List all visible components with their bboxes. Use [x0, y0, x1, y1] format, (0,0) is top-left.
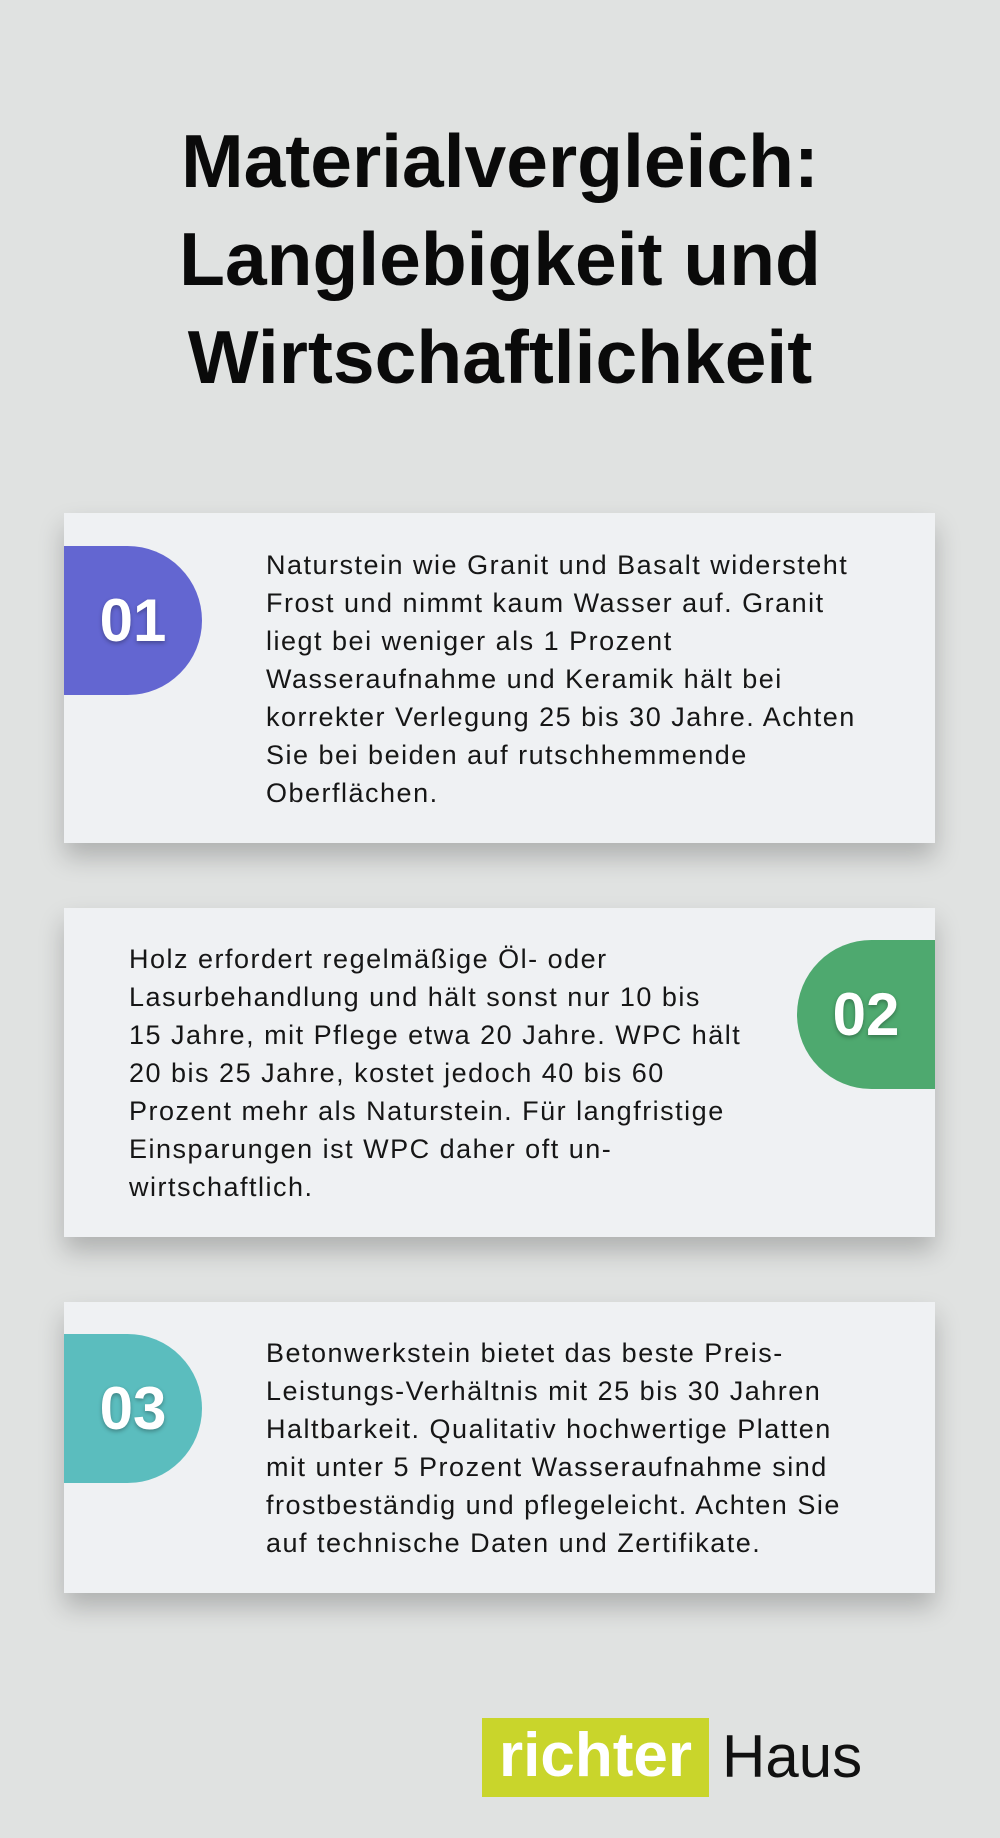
text 01: Sie bei beiden auf rutschhemmende — [266, 740, 748, 770]
text 03: frostbeständig und pflegeleicht. Achten Sie — [266, 1490, 841, 1520]
title: Langlebigkeit und — [179, 217, 821, 301]
logo box richter: richter — [499, 1721, 692, 1790]
text 01: Frost und nimmt kaum Wasser auf. Granit — [266, 588, 825, 618]
text 01: Naturstein wie Granit und Basalt widersteht — [266, 550, 848, 580]
text 01 — [266, 550, 856, 808]
text 01: Wasseraufnahme und Keramik hält bei — [266, 664, 783, 694]
badge 03: 03 — [100, 1375, 166, 1442]
text 02: 20 bis 25 Jahre, kostet jedoch 40 bis 60 — [129, 1058, 665, 1088]
text 02: Prozent mehr als Naturstein. Für langfristige — [129, 1096, 725, 1126]
text 03: Haltbarkeit. Qualitativ hochwertige Platten — [266, 1414, 832, 1444]
title: Wirtschaftlichkeit — [188, 315, 812, 399]
text 02: wirtschaftlich. — [129, 1172, 314, 1202]
title — [179, 119, 821, 399]
text 01: liegt bei weniger als 1 Prozent — [266, 626, 673, 656]
badge 02: 02 — [833, 981, 899, 1048]
text 02: Lasurbehandlung und hält sonst nur 10 bis — [129, 982, 701, 1012]
text 03: Betonwerkstein bietet das beste Preis- — [266, 1338, 784, 1368]
text 03: auf technische Daten und Zertifikate. — [266, 1528, 761, 1558]
panel: card 03 — [64, 1302, 935, 1593]
text 01: Oberflächen. — [266, 778, 439, 808]
text 02: Holz erfordert regelmäßige Öl- oder — [129, 944, 608, 974]
text 02 — [129, 944, 741, 1202]
panel: card 02 — [64, 908, 935, 1237]
badge 03 — [64, 1334, 202, 1483]
title: Materialvergleich: — [181, 119, 819, 203]
text 02: 15 Jahre, mit Pflege etwa 20 Jahre. WPC hält — [129, 1020, 741, 1050]
badge 01: 01 — [100, 587, 166, 654]
panel: card 01 — [64, 513, 935, 843]
badge 02 — [797, 940, 935, 1089]
text 02: Einsparungen ist WPC daher oft un- — [129, 1134, 612, 1164]
text 01: korrekter Verlegung 25 bis 30 Jahre. Achten — [266, 702, 856, 732]
logo — [482, 1718, 862, 1797]
text 03: Leistungs-Verhältnis mit 25 bis 30 Jahren — [266, 1376, 821, 1406]
badge 01 — [64, 546, 202, 695]
logo text Haus: Haus — [722, 1723, 862, 1790]
text 03: mit unter 5 Prozent Wasseraufnahme sind — [266, 1452, 828, 1482]
text 03 — [266, 1338, 841, 1558]
